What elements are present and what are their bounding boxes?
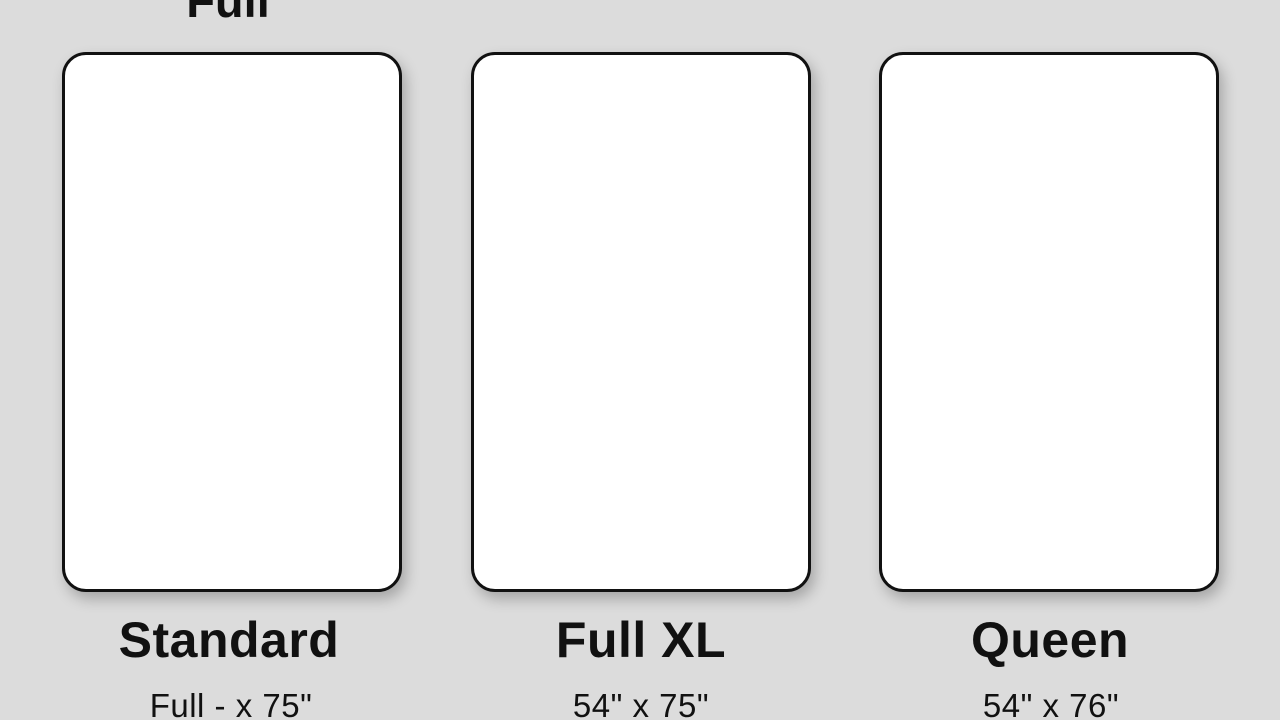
panel: full xl card — [471, 52, 811, 592]
label: full xl: Full XL — [556, 612, 726, 668]
label: queen: Queen — [971, 612, 1129, 668]
label: standard: Standard — [119, 612, 339, 668]
panel: queen card — [879, 52, 1219, 592]
panel: standard card — [62, 52, 402, 592]
